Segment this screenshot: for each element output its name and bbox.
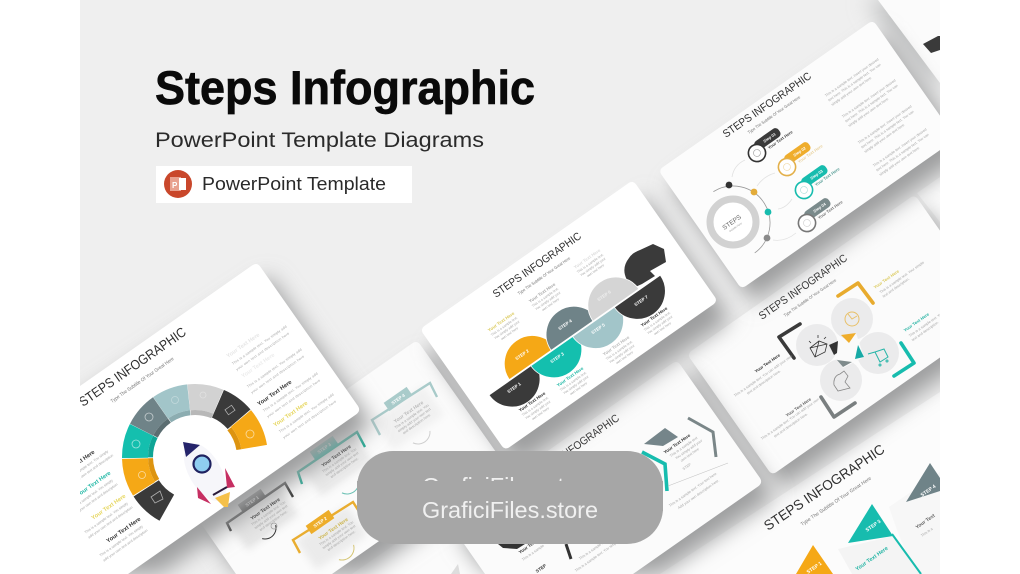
step 03 (791, 157, 843, 202)
step 3 bracket: This is a sample text. You (322, 447, 357, 474)
text block: Your Text Here (663, 432, 692, 455)
left text column: add your own text and description (102, 528, 149, 562)
dark bar (566, 544, 571, 559)
step 2 bracket: simply add your own text (322, 524, 356, 550)
panel: far right slide corner (917, 177, 940, 222)
slide title: STEPS INFOGRAPHIC (761, 441, 887, 533)
left text column: This is a sample text. You simply (99, 524, 144, 558)
long caption: Add your own description here. (677, 478, 720, 510)
upper text blocks: You simply add your (493, 319, 521, 340)
slide subtitle: Type The Subtitle Of Your Great Here (747, 94, 802, 135)
step 3 bracket: and description here. (330, 457, 359, 479)
step 1 bracket (227, 483, 298, 550)
step 4 bracket: This is a sample text. You (394, 403, 430, 430)
right text column: This is a sample text. You simply add (262, 372, 319, 413)
step labels: STEP 2 (514, 348, 530, 361)
text block: STEP (682, 462, 692, 471)
step 02: Your Text Here (797, 143, 824, 164)
step 4 bracket: simply add your own text (397, 407, 432, 433)
step 4 bracket: STEP 4 (390, 392, 406, 406)
step 01: Your Text Here (767, 129, 794, 150)
text blocks: Your Text Here (873, 268, 901, 290)
step 01: Step 01 (762, 131, 777, 144)
watermark: GraficiFiles.store (422, 473, 598, 499)
step 04: Step 04 (812, 201, 827, 214)
step 3 bracket: Your Text Here (321, 444, 353, 469)
text blocks: Your Text Here (754, 352, 782, 374)
icon: PowerPoint logo: P (172, 181, 178, 190)
text block: You simply add your (675, 438, 704, 460)
right text column: This is a sample text. You simply add (246, 348, 303, 389)
text blocks: Your Text Here (785, 396, 813, 418)
upper text blocks: own text here (500, 326, 519, 341)
upper text blocks: This is a sample text. (576, 252, 605, 274)
lower text blocks: This is a sample text. (605, 339, 634, 361)
slide subtitle: Type The Subtitle Of Your Great Here (800, 476, 873, 528)
text block (663, 428, 711, 474)
left margin (0, 0, 80, 574)
icon: cart (868, 349, 888, 366)
step 3 flag: Your Text Here (855, 546, 890, 573)
step 1 bracket: This is a sample text. You (251, 500, 286, 527)
left text column: This is a sample text. You simply (64, 449, 109, 483)
text blocks (733, 254, 948, 445)
panel: bottom tile (352, 534, 510, 574)
step 2 bracket: This is a sample text. You (319, 520, 354, 547)
upper text blocks: This is a sample text. (490, 315, 519, 337)
left text column: add your own text and description (72, 482, 119, 516)
slide subtitle: Type The Subtitle Of Your Great Here (783, 277, 838, 318)
right card: This is a (920, 527, 934, 538)
lower text blocks: own text here (615, 350, 634, 365)
paragraph column: text here. This is a sample text. You can (827, 63, 882, 102)
step 02: Step 02 (792, 145, 807, 158)
lower text blocks: own text here (569, 381, 588, 396)
step 1 bracket: simply add your own text (254, 504, 288, 530)
panel: bracket steps slide (186, 342, 511, 574)
text blocks: text and description. (882, 277, 910, 299)
lower text blocks: own text here (531, 406, 550, 421)
step 3 bracket: simply add your own text (325, 451, 359, 477)
lower text (518, 527, 638, 574)
teal chevron (642, 452, 667, 491)
text blocks: This is a sample text. You can add your own (733, 354, 793, 398)
slide subtitle: Type The Subtitle Of Your Great Here (517, 255, 572, 296)
text blocks: text and description. (911, 320, 940, 342)
lower text blocks: Your Text Here (640, 305, 669, 328)
lower text blocks: This is a sample text. (559, 370, 588, 392)
paragraph column: text here. This is a sample text. You can (860, 110, 915, 149)
connecting arc and nodes (682, 160, 796, 274)
watermark: GraficiFiles.store (422, 497, 598, 523)
lower text blocks: This is a sample text. (643, 310, 672, 332)
ring of seven steps (111, 373, 279, 541)
step labels: STEP 3 (549, 351, 565, 364)
step 3 bracket (298, 431, 372, 496)
left text column: This is a sample text. You simply (84, 501, 129, 535)
paragraph column: This is a sample text. Insert your desired (872, 128, 927, 168)
paragraph column (824, 58, 934, 177)
top dark shape (624, 244, 666, 288)
slide title: STEPS INFOGRAPHIC (757, 252, 850, 322)
step 2 bracket: and description here. (327, 530, 356, 552)
step 04 (794, 190, 846, 235)
text blocks: text and description here. (746, 369, 782, 395)
paragraph column: text here. This is a sample text. You can (844, 84, 899, 123)
text blocks: This is a sample text. Your (908, 310, 945, 338)
left text column (60, 442, 150, 562)
right text column: This is a sample text. You simply add (231, 325, 288, 366)
right text column: your own text and description here (282, 400, 337, 440)
icon: diamond (809, 335, 827, 357)
upper text blocks: own text here (586, 263, 605, 278)
center arrows (829, 333, 864, 367)
right text column: your own text and description here (266, 379, 321, 419)
step 2 bracket (293, 502, 367, 570)
text blocks: Your Text Here (903, 311, 931, 333)
icon: badge (845, 312, 859, 326)
lower text blocks: Your Text Here (602, 334, 631, 357)
left text column: Your Text Here (106, 516, 143, 545)
step 1 bracket: Your Text Here (250, 497, 282, 522)
paragraph column: This is a sample text. Insert your desired (857, 105, 912, 145)
lower text blocks: You simply add your (608, 343, 636, 364)
upper text blocks: You simply add your (579, 256, 607, 277)
right text column: Your Text Here (241, 352, 276, 380)
step 3 flag (838, 504, 921, 574)
ring segment icons (132, 392, 254, 503)
step 03: Your Text Here (814, 166, 841, 187)
panel: flower steps slide (687, 195, 1010, 489)
step 04: Your Text Here (817, 199, 844, 220)
lower text blocks: Your Text Here (518, 390, 547, 413)
long caption: This is a sample text. Your text here. (668, 471, 718, 508)
step 4 bracket (372, 383, 444, 450)
panel: hexagon steps slide (448, 362, 775, 574)
lower text: This is a sample (521, 544, 545, 562)
step 2 bracket: STEP 2 (312, 515, 328, 529)
icon: tile glyph (451, 564, 460, 574)
step 01 (744, 120, 796, 165)
half circles (472, 251, 676, 418)
right text column: Your Text Here (257, 379, 294, 408)
right text column: your own text and description here (250, 355, 305, 395)
upper text blocks (487, 247, 610, 344)
step 03: Step 03 (809, 168, 824, 181)
upper text blocks: Your Text Here (528, 281, 557, 304)
step labels: STEP 7 (633, 294, 649, 307)
badge: PowerPoint Template (156, 166, 412, 203)
icon: rocket (175, 436, 235, 508)
panel: triangle steps slide (660, 392, 940, 574)
right margin (940, 0, 1020, 574)
step 4 bracket: and description here. (402, 413, 432, 435)
right card (889, 472, 940, 574)
upper text blocks: This is a sample text. (531, 286, 560, 308)
step 3 flag: STEP 3 (865, 519, 882, 534)
step labels (506, 289, 649, 394)
step labels: STEP 5 (590, 322, 606, 335)
step 3 bracket: STEP 3 (316, 441, 332, 455)
paragraph column: simply add your own text here. (848, 97, 890, 128)
step labels: STEP 4 (557, 318, 573, 331)
step labels: STEP 6 (596, 289, 612, 302)
right text column (226, 325, 339, 440)
lower text: This is a sample text. Your (578, 533, 616, 561)
step labels: STEP 1 (506, 381, 522, 394)
step 4 bracket: Your Text Here (393, 400, 425, 425)
slide title: STEPS INFOGRAPHIC (721, 70, 814, 140)
left text column: add your own text and description (87, 505, 134, 539)
paragraph column: simply add your own text here. (831, 76, 873, 107)
paragraph column: simply add your own text here. (864, 123, 906, 154)
upper text blocks: Your Text Here (573, 247, 602, 270)
text blocks: This is a sample text. Your simple (879, 261, 925, 294)
lower text blocks: You simply add your (646, 314, 674, 335)
left text column: Your Text Here (60, 449, 97, 478)
paragraph column: This is a sample text. Insert your desired (824, 58, 879, 98)
lower text: STEP (535, 563, 547, 574)
upper text blocks: own text here (541, 297, 560, 312)
icon: PowerPoint logo (164, 170, 192, 198)
left text column: add your own text and description (68, 453, 114, 487)
central ring: Subtitle Here (728, 221, 743, 233)
left text column: Your Text Here (91, 493, 128, 522)
right text column: Your Text Here (273, 400, 310, 429)
subheading: PowerPoint Template Diagrams (155, 128, 484, 152)
step 4 triangle: STEP 4 (920, 484, 937, 499)
center white (829, 333, 864, 368)
lower text blocks (518, 305, 677, 424)
slide title: STEPS INFOGRAPHIC (529, 412, 622, 482)
right card: Your Text (915, 513, 937, 531)
lower text blocks: Your Text Here (556, 365, 585, 388)
slide title: STEPS INFOGRAPHIC (76, 324, 189, 409)
text block: This is a sample text (669, 436, 698, 458)
paragraph column: text here. This is a sample text. You can (875, 133, 930, 172)
step 1 bracket: and description here. (259, 510, 288, 532)
gray tag (644, 428, 678, 446)
upper text blocks: You simply add your (534, 290, 562, 311)
central ring (710, 199, 756, 245)
icon: hand (834, 371, 850, 391)
dark tag (498, 544, 525, 549)
central ring: STEPS (721, 213, 743, 232)
slide title: STEPS INFOGRAPHIC (491, 230, 584, 300)
left text column: Your Text Here (76, 470, 113, 499)
flower petals (796, 298, 899, 401)
lower text blocks: You simply add your (524, 399, 552, 420)
slide subtitle: Type The Subtitle Of Your Great Here (110, 356, 176, 405)
gray chevron (688, 418, 716, 457)
text blocks: This is a sample text. You can add your own (760, 397, 820, 441)
paragraph column: simply add your own text here. (879, 146, 921, 177)
lower text: Your Text (518, 539, 537, 555)
lower text blocks: This is a sample text. (521, 395, 550, 417)
step 2 bracket: Your Text Here (318, 517, 350, 542)
right text column: Your Text Here (226, 332, 261, 360)
step 1 triangle (796, 545, 833, 574)
badge: PowerPoint Template: PowerPoint Template (202, 174, 386, 194)
lower text blocks: own text here (653, 321, 672, 336)
text blocks: text and description here. (773, 412, 809, 438)
step 1 bracket: STEP 1 (244, 494, 260, 508)
brackets (779, 283, 914, 417)
lower text blocks: You simply add your (562, 374, 590, 395)
panel: rocket slide (60, 264, 373, 574)
upper text blocks: Your Text Here (487, 310, 516, 333)
right text column: This is a sample text. You simply add (278, 393, 335, 434)
paragraph column: This is a sample text. Insert your desired (841, 79, 896, 119)
right text column: your own text and description here (235, 332, 290, 372)
step 4 triangle (906, 463, 940, 502)
text block: own text here (680, 447, 700, 463)
thin line (668, 463, 728, 486)
lower text: This is a sample text. You simply add your text. (574, 527, 638, 573)
panel: top right slide (866, 0, 940, 95)
panel: circular steps slide (658, 20, 968, 303)
panel: S-curve steps slide (420, 180, 731, 468)
left text column: This is a sample text. You simply (69, 478, 114, 512)
watermark (357, 451, 663, 544)
step 02 (774, 134, 826, 179)
main heading: Steps Infographic (155, 61, 535, 114)
